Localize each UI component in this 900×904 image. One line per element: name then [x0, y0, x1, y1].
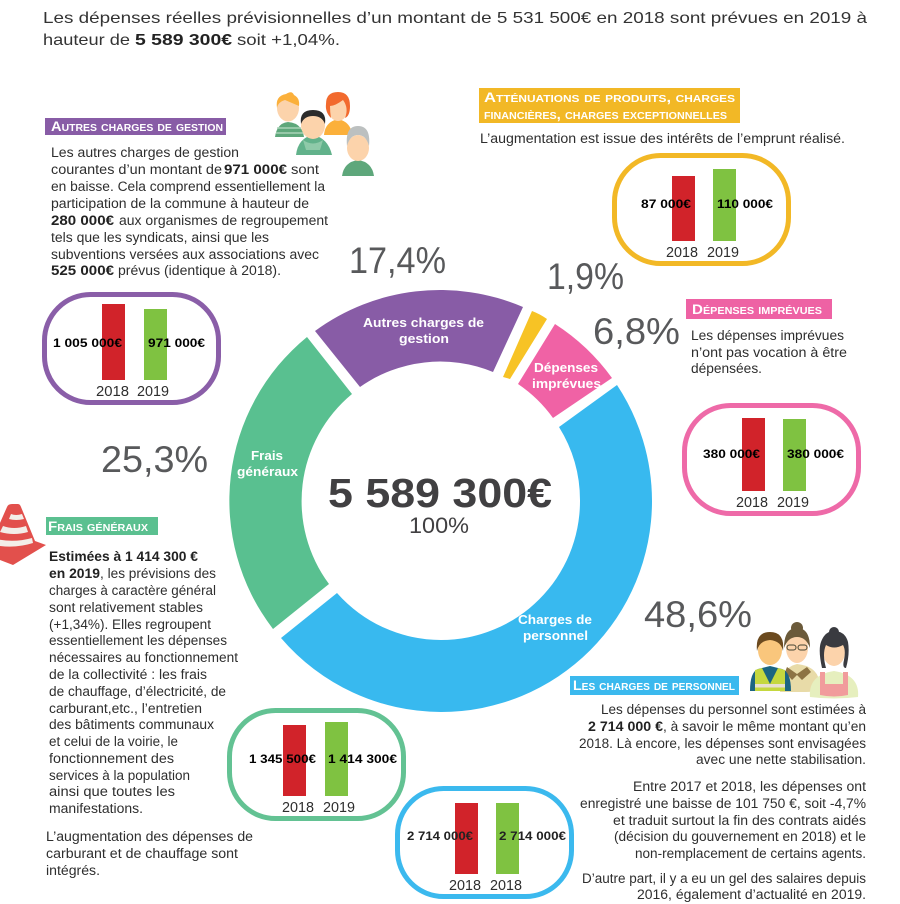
segment: frais généraux: [229, 337, 352, 629]
icon: three workers: [750, 622, 858, 698]
text block: dépenses imprévues: dépensées.: [691, 361, 762, 376]
text block: frais généraux: nécessaires au fonctionnement: [49, 650, 238, 665]
text block: charges de personnel: non-remplacement de certains agents.: [635, 846, 866, 861]
percent 17,4%: 17,4%: [349, 240, 446, 281]
donut chart: [229, 290, 652, 712]
heading: atténuations: Atténuations de produits, charges: [484, 89, 735, 105]
segment: charges de personnel: [281, 385, 652, 712]
panel: atténuations: [479, 88, 845, 264]
text block: dépenses imprévues: Les dépenses imprévues: [691, 328, 844, 343]
bar chart: frais généraux: 1 345 500€: [249, 754, 317, 766]
total percent: 100%: [409, 513, 469, 538]
bar chart: dépenses imprévues: 2018: [736, 495, 768, 511]
text block: autres charges: en baisse. Cela comprend essentiellement la: [51, 179, 325, 194]
panel: frais généraux: [0, 504, 404, 878]
text block: frais généraux: [46, 549, 253, 878]
text block: autres charges: prévus (identique à 2018).: [118, 263, 281, 278]
bar chart: charges de personnel: 2018: [490, 878, 522, 894]
label: autres charges: Autres charges de: [363, 315, 484, 330]
intro text: [43, 10, 867, 49]
heading: atténuations: financières, charges exceptionnelles: [484, 106, 727, 122]
label: dépenses imprévues: [532, 360, 601, 391]
bar chart: frais généraux: [230, 710, 404, 818]
bar chart: autres charges: 1 005 000€: [53, 338, 123, 350]
text block: frais généraux: et celui de la voirie, le: [49, 734, 178, 749]
bar chart: atténuations: 87 000€: [641, 199, 692, 211]
segment: atténuations: [503, 311, 547, 379]
percent 1,9%: 1,9%: [547, 256, 624, 297]
text block: dépenses imprévues: [691, 328, 847, 376]
heading: charges de personnel: Les charges de personnel: [573, 677, 735, 693]
text block: charges de personnel: 2018. Là encore, les dépenses sont envisagées: [579, 736, 866, 751]
text block: charges de personnel: 2016, également d’actualité en 2019.: [637, 887, 866, 902]
text block: charges de personnel: D’autre part, il y a eu un gel des salaires depuis: [582, 871, 866, 886]
bar chart: autres charges: 971 000€: [148, 338, 206, 350]
text block: autres charges: Les autres charges de gestion: [51, 145, 239, 160]
percent 25,3%: 25,3%: [101, 439, 208, 480]
intro text: hauteur de: [43, 32, 130, 49]
text block: frais généraux: des bâtiments communaux: [49, 717, 214, 732]
icon: traffic cone: [0, 504, 46, 565]
text block: charges de personnel: avec une nette stabilisation.: [696, 752, 866, 767]
total amount: 5 589 300€: [328, 470, 552, 516]
text block: autres charges: 280 000€: [51, 213, 115, 228]
bar chart: charges de personnel: 2 714 000€: [407, 831, 474, 843]
bar chart: atténuations: [614, 156, 788, 264]
heading: dépenses imprévues: Dépenses imprévues: [692, 301, 822, 317]
label: charges de personnel: [518, 612, 592, 643]
text block: charges de personnel: Les dépenses du personnel sont estimées à: [601, 702, 866, 717]
text block: autres charges: subventions versées aux associations avec: [51, 247, 319, 262]
label: autres charges: [363, 315, 484, 346]
text block: charges de personnel: [579, 702, 866, 902]
label: charges de personnel: Charges de: [518, 612, 592, 627]
bar chart: charges de personnel: 2 714 000€: [499, 831, 567, 843]
segment: autres charges de gestion: [315, 290, 523, 387]
bar chart: charges de personnel: 2018: [449, 878, 481, 894]
text block: frais généraux: ainsi que toutes les: [49, 784, 175, 799]
bar chart: frais généraux: 2019: [323, 800, 355, 816]
text block: frais généraux: manifestations.: [49, 801, 143, 816]
text block: frais généraux: L’augmentation des dépenses de: [46, 829, 253, 844]
bar chart: autres charges: 2019: [137, 384, 169, 400]
text block: frais généraux: en 2019: [49, 566, 100, 581]
heading: autres charges: Autres charges de gestion: [51, 118, 223, 134]
text block: frais généraux: fonctionnement des: [49, 751, 174, 766]
segment: dépenses imprévues: [518, 324, 612, 418]
heading: atténuations: [479, 88, 740, 123]
text block: charges de personnel: 2 714 000 €: [588, 719, 664, 734]
text block: charges de personnel: enregistré une baisse de 101 750 €, soit -4,7%: [580, 796, 866, 811]
label: dépenses imprévues: Dépenses: [534, 360, 598, 375]
label: frais généraux: [237, 448, 299, 479]
text block: frais généraux: (+1,34%). Elles regroupent: [49, 617, 211, 632]
bar chart: frais généraux: 1 414 300€: [328, 754, 398, 766]
text block: autres charges: tels que les syndicats, ainsi que les: [51, 230, 269, 245]
bar chart: dépenses imprévues: 380 000€: [787, 449, 845, 461]
percent 48,6%: 48,6%: [644, 594, 752, 635]
text block: charges de personnel: Entre 2017 et 2018, les dépenses ont: [633, 779, 866, 794]
intro text: Les dépenses réelles prévisionnelles d’un montant de 5 531 500€ en 2018 sont prévues en 2019 à: [43, 10, 867, 27]
label: dépenses imprévues: imprévues: [532, 376, 601, 391]
bar chart: autres charges: [44, 294, 218, 402]
text block: frais généraux: services à la population: [49, 768, 190, 783]
text block: frais généraux: essentiellement les dépenses: [49, 633, 227, 648]
text block: autres charges: 971 000€: [224, 162, 288, 177]
icon: group of four people: [275, 92, 374, 176]
heading: frais généraux: Frais généraux: [48, 518, 148, 534]
text block: charges de personnel: , à savoir le même montant qu’en: [663, 719, 866, 734]
percent 6,8%: 6,8%: [593, 311, 680, 352]
panel: dépenses imprévues: [684, 299, 858, 514]
panel: charges de personnel: [398, 676, 866, 902]
text block: autres charges: participation de la commune à hauteur de: [51, 196, 309, 211]
text block: autres charges: aux organismes de regroupement: [119, 213, 328, 228]
text block: dépenses imprévues: n’ont pas vocation à être: [691, 345, 847, 360]
bar chart: atténuations: 110 000€: [717, 199, 774, 211]
text block: autres charges: [51, 145, 328, 278]
bar chart: dépenses imprévues: 380 000€: [703, 449, 761, 461]
text block: frais généraux: carburant,etc., l’entretien: [49, 701, 202, 716]
text block: atténuations: L’augmentation est issue des intérêts de l’emprunt réalisé.: [480, 131, 845, 146]
text block: charges de personnel: (décision du gouvernement en 2018) et le: [614, 829, 866, 844]
label: charges de personnel: personnel: [523, 628, 588, 643]
intro text: 5 589 300€: [135, 32, 232, 49]
text block: frais généraux: charges à caractère général: [49, 583, 216, 598]
bar chart: dépenses imprévues: 2019: [777, 495, 809, 511]
intro text: soit +1,04%.: [237, 32, 340, 49]
text block: frais généraux: , les prévisions des: [100, 566, 216, 581]
bar chart: atténuations: 2019: [707, 245, 739, 261]
label: frais généraux: Frais: [251, 448, 283, 463]
bar chart: atténuations: 2018: [666, 245, 698, 261]
text block: autres charges: sont: [291, 162, 319, 177]
bar chart: autres charges: 2018: [96, 384, 129, 400]
text block: frais généraux: Estimées à 1 414 300 €: [49, 549, 198, 564]
heading: dépenses imprévues: [686, 299, 832, 319]
text block: frais généraux: de la collectivité : les frais: [49, 667, 207, 682]
text block: autres charges: courantes d’un montant de: [51, 162, 222, 177]
text block: frais généraux: sont relativement stables: [49, 600, 203, 615]
text block: charges de personnel: et traduit surtout la fin des contrats aidés: [613, 813, 866, 828]
panel: autres charges de gestion: [44, 118, 328, 402]
bar chart: dépenses imprévues: [684, 406, 858, 514]
text block: frais généraux: intégrés.: [46, 863, 100, 878]
text block: frais généraux: de chauffage, d’électricité, de: [49, 684, 226, 699]
label: autres charges: gestion: [399, 331, 449, 346]
bar chart: frais généraux: 2018: [282, 800, 314, 816]
bar chart: charges de personnel: [398, 788, 572, 896]
text block: frais généraux: carburant et de chauffage sont: [46, 846, 238, 861]
label: frais généraux: généraux: [237, 464, 299, 479]
text block: autres charges: 525 000€: [51, 263, 115, 278]
